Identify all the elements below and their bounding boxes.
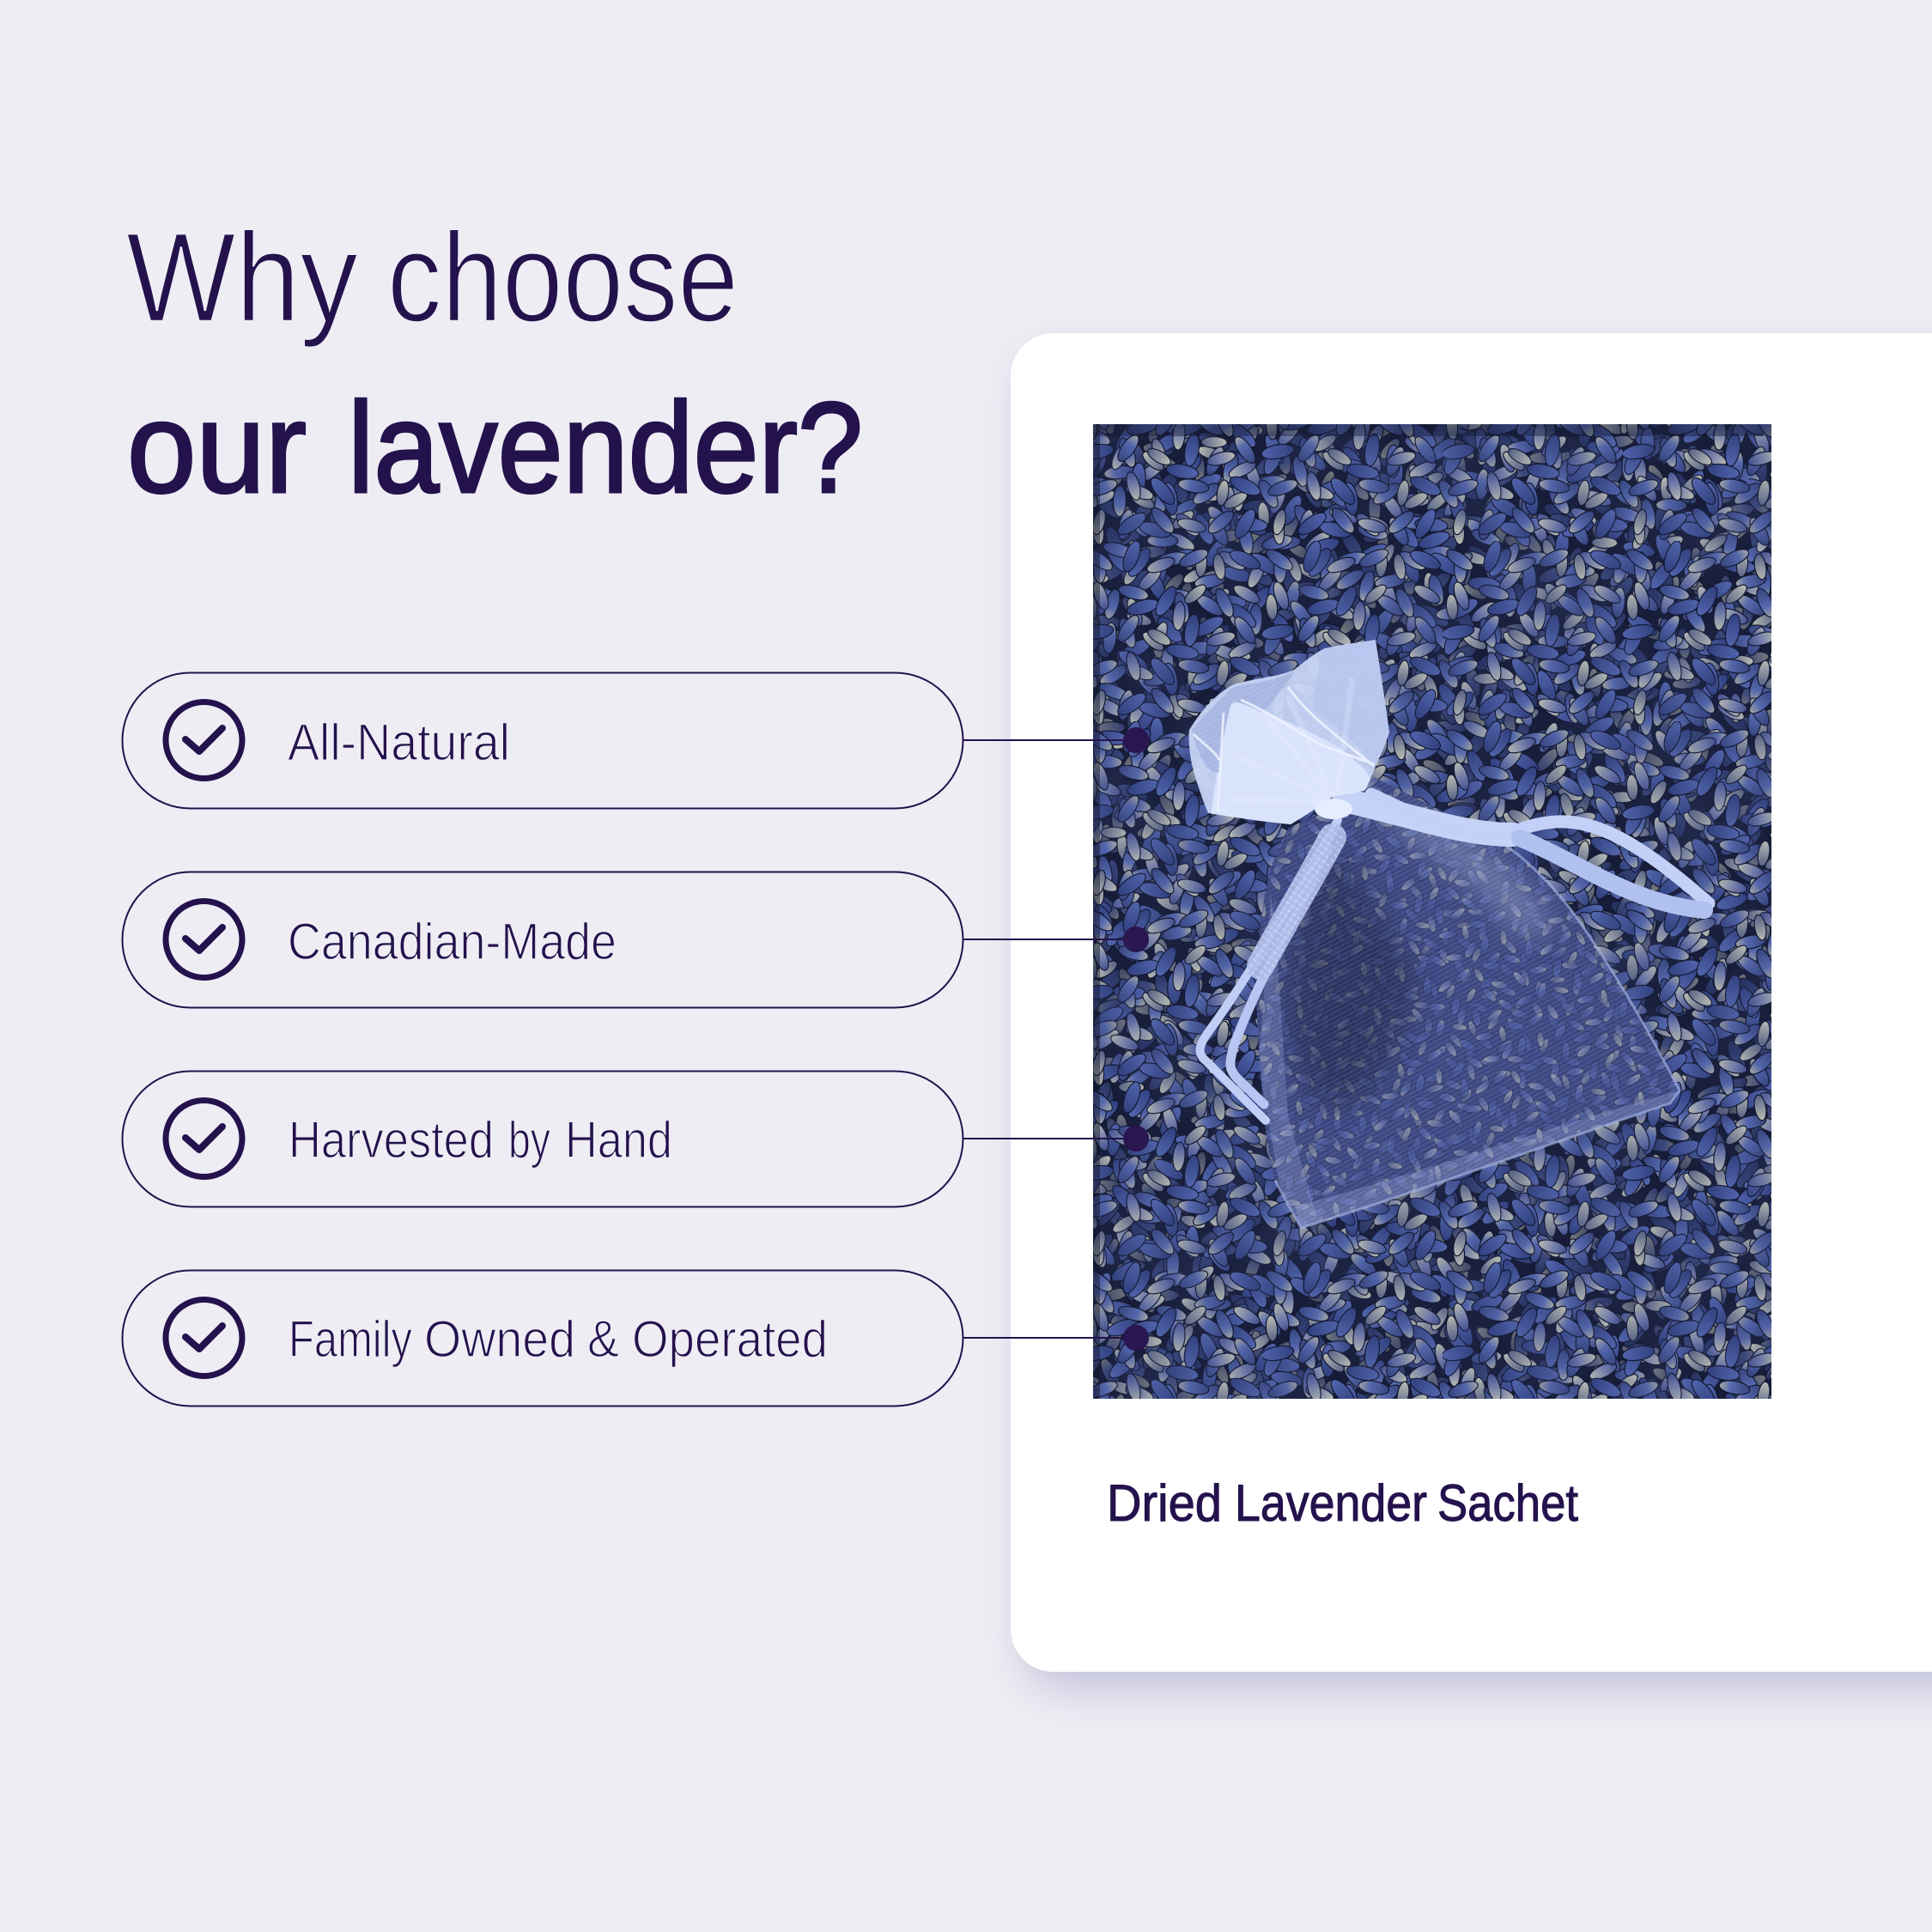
label: Hand <box>565 1111 672 1169</box>
connector line and dot <box>963 727 1149 753</box>
label: Operated <box>632 1310 828 1368</box>
panel: product card <box>1011 333 1932 1672</box>
sachet bow <box>1188 640 1389 824</box>
connector line and dot <box>963 1325 1149 1351</box>
icon: check circle <box>166 702 242 778</box>
title line two: lavender? <box>348 375 863 519</box>
label: Owned <box>424 1310 575 1368</box>
caption: Lavender <box>1235 1474 1427 1532</box>
title <box>126 207 863 519</box>
pill <box>122 673 963 809</box>
callout: Canadian-Made <box>122 872 1149 1008</box>
icon: check circle <box>166 902 242 977</box>
sachet body <box>1257 777 1681 1230</box>
label: All-Natural <box>288 714 510 771</box>
sachet ribbons <box>1200 794 1709 1121</box>
label: by <box>508 1111 550 1169</box>
label: Family <box>289 1310 412 1368</box>
pill <box>122 1072 963 1207</box>
label: Canadian-Made <box>288 913 617 970</box>
icon: check circle <box>166 1300 242 1376</box>
pill <box>122 1271 963 1406</box>
label: & <box>587 1310 619 1368</box>
title line two: our <box>127 375 307 519</box>
connector line and dot <box>963 1126 1149 1151</box>
label: Harvested <box>289 1111 494 1169</box>
callout: All-Natural <box>122 673 1149 809</box>
card background <box>1011 333 1932 1672</box>
caption: Sachet <box>1437 1474 1578 1532</box>
title line one: choose <box>387 207 738 349</box>
photo: lavender sachet <box>1093 424 1771 1399</box>
connector line and dot <box>963 927 1149 952</box>
pill <box>122 872 963 1008</box>
callout: Family Owned & Operated <box>122 1271 1149 1406</box>
caption: Dried <box>1107 1474 1222 1532</box>
callout: Harvested by Hand <box>122 1072 1149 1207</box>
title line one: Why <box>126 207 358 349</box>
icon: check circle <box>166 1101 242 1176</box>
